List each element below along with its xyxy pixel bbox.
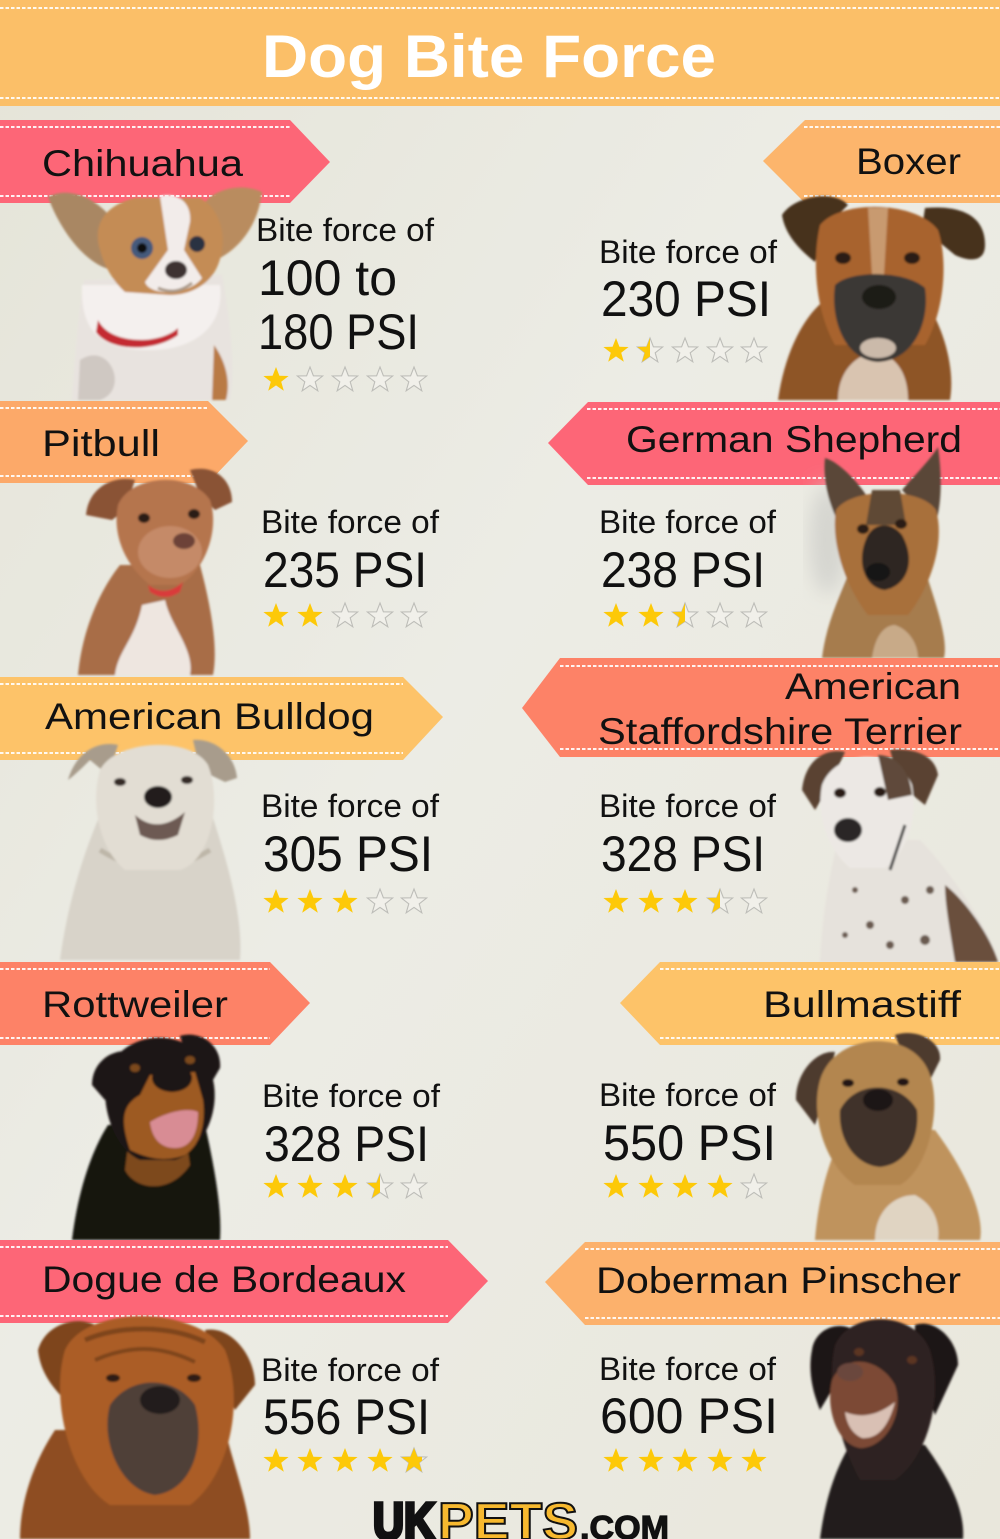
text: Bullmastiff bite force: [599, 1077, 776, 1171]
text: Dogue de Bordeaux bite force: [261, 1352, 439, 1445]
title banner: [0, 0, 1000, 106]
icon: Pitbull dog: [78, 469, 232, 675]
panel: German Shepherd: [548, 402, 1000, 658]
text: American Staffordshire Terrier bite force: Bite force of: [599, 788, 776, 824]
banner: American Staffordshire Terrier: American: [785, 666, 961, 707]
banner: Rottweiler: Rottweiler: [42, 984, 228, 1025]
icon: Doberman Pinscher dog: [810, 1319, 963, 1539]
rating stars: 3 of 5: [263, 889, 427, 913]
banner: Dogue de Bordeaux: Dogue de Bordeaux: [42, 1259, 407, 1300]
text: Doberman Pinscher bite force: [599, 1351, 778, 1444]
text: American Staffordshire Terrier bite force: 328 PSI: [601, 826, 765, 882]
panel: Rottweiler: [0, 962, 440, 1240]
banner: German Shepherd: German Shepherd: [626, 419, 962, 460]
text: American Bulldog bite force: 305 PSI: [263, 826, 433, 882]
banner: German Shepherd: [548, 402, 1000, 485]
panel: Dogue de Bordeaux: [0, 1240, 488, 1539]
icon: Boxer dog: [778, 196, 985, 400]
banner: Bullmastiff: [620, 962, 1000, 1045]
text: Rottweiler bite force: 328 PSI: [264, 1116, 429, 1172]
text: German Shepherd bite force: Bite force of: [599, 504, 776, 540]
text: Pitbull bite force: [261, 504, 439, 598]
text: Bullmastiff bite force: 550 PSI: [603, 1115, 776, 1171]
rating stars: 2 of 5: [263, 603, 427, 627]
banner: Pitbull: [0, 401, 248, 483]
text: Boxer bite force: [599, 234, 777, 327]
icon: Dogue de Bordeaux dog: [20, 1316, 255, 1539]
rating stars: 4.8 of 5: [263, 1448, 427, 1472]
panel: Doberman Pinscher: [545, 1242, 1000, 1539]
banner: Pitbull: Pitbull: [42, 423, 160, 464]
icon: American Bulldog dog: [60, 740, 240, 960]
text: Pitbull bite force: Bite force of: [261, 504, 439, 540]
banner: American Staffordshire Terrier: Staffordshire Terrier: [598, 711, 962, 752]
text: Chihuahua bite force: Bite force of: [256, 212, 434, 248]
title: Dog Bite Force: [262, 23, 716, 90]
rating stars: 3.5 of 5: [603, 889, 767, 913]
panel: Bullmastiff: [599, 962, 1000, 1240]
panel: American Staffordshire Terrier: [522, 658, 1000, 962]
rating stars: 1 of 5: [263, 367, 427, 391]
text: Pitbull bite force: 235 PSI: [263, 542, 427, 598]
text: Doberman Pinscher bite force: 600 PSI: [600, 1388, 778, 1444]
text: Dogue de Bordeaux bite force: Bite force of: [261, 1352, 439, 1388]
text: Rottweiler bite force: Bite force of: [262, 1078, 440, 1114]
text: American Bulldog bite force: [261, 788, 439, 882]
banner: American Bulldog: American Bulldog: [45, 696, 374, 737]
banner: Doberman Pinscher: Doberman Pinscher: [596, 1260, 961, 1301]
panel: Chihuahua: [0, 120, 434, 400]
rating stars: 1.5 of 5: [603, 338, 767, 362]
banner: Bullmastiff: Bullmastiff: [763, 984, 962, 1025]
rating stars: 5 of 5: [603, 1448, 767, 1472]
text: German Shepherd bite force: [599, 504, 776, 598]
panel: Boxer: [599, 120, 1000, 400]
icon: Bullmastiff dog: [796, 1033, 981, 1240]
icon: Chihuahua dog: [48, 188, 262, 400]
rating stars: 4 of 5: [603, 1174, 767, 1198]
text: Bullmastiff bite force: Bite force of: [599, 1077, 776, 1113]
banner: American Bulldog: [0, 677, 443, 760]
panel: Pitbull: [0, 401, 439, 675]
banner: Chihuahua: [0, 120, 330, 203]
icon: American Staffordshire Terrier dog: [802, 750, 998, 962]
text: Boxer bite force: 230 PSI: [601, 271, 771, 327]
rating stars: 2.5 of 5: [603, 603, 767, 627]
banner: Dogue de Bordeaux: [0, 1240, 488, 1323]
icon: Rottweiler dog: [72, 1035, 220, 1240]
text: Chihuahua bite force: [256, 212, 434, 360]
text: American Bulldog bite force: Bite force of: [261, 788, 439, 824]
icon: German Shepherd dog: [810, 447, 945, 658]
text: Rottweiler bite force: [262, 1078, 440, 1172]
panel: American Bulldog: [0, 677, 443, 960]
logo: UKPETS.COM: [373, 1493, 669, 1539]
text: Boxer bite force: Bite force of: [599, 234, 777, 270]
banner: Boxer: Boxer: [856, 141, 961, 182]
rating stars: 3.5 of 5: [263, 1174, 427, 1198]
text: American Staffordshire Terrier bite force: [599, 788, 776, 882]
text: Doberman Pinscher bite force: Bite force of: [599, 1351, 776, 1387]
text: Dogue de Bordeaux bite force: 556 PSI: [263, 1389, 430, 1445]
banner: Boxer: [763, 120, 1000, 203]
banner: Chihuahua: Chihuahua: [42, 143, 243, 184]
banner: Rottweiler: [0, 962, 310, 1045]
banner: American Staffordshire Terrier: [522, 658, 1000, 757]
text: German Shepherd bite force: 238 PSI: [601, 542, 765, 598]
text: Chihuahua bite force: 100 to: [258, 250, 397, 306]
banner: Doberman Pinscher: [545, 1242, 1000, 1325]
text: Chihuahua bite force: 180 PSI: [258, 304, 419, 360]
